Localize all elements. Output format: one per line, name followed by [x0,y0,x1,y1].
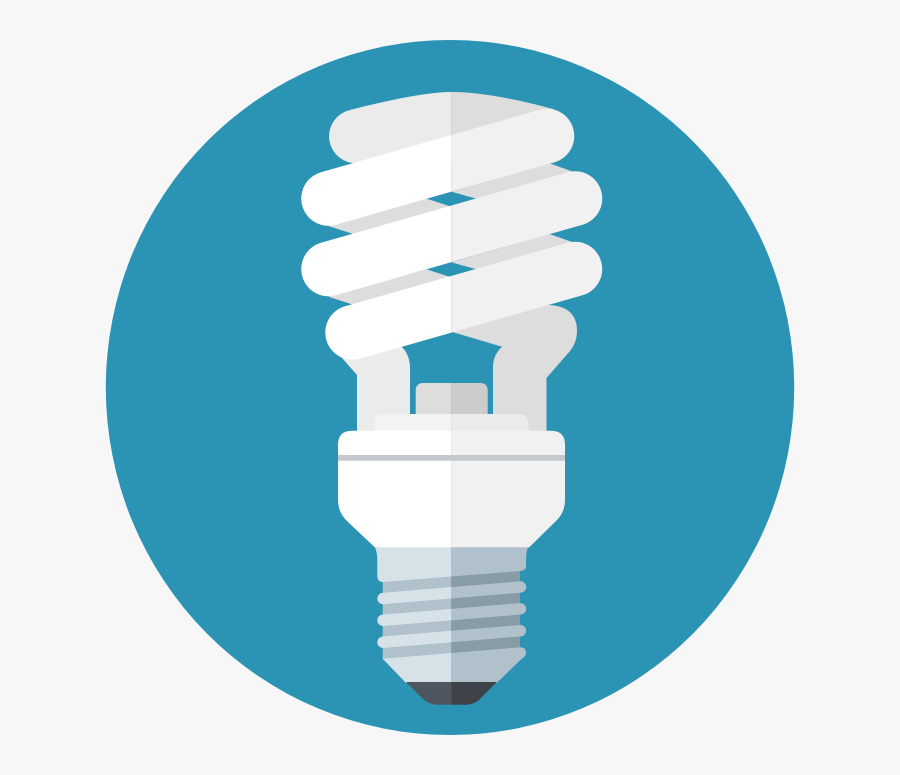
collar [410,414,528,442]
screw core [383,570,520,660]
spiral shadow strips [328,163,573,305]
plastic base [338,431,565,548]
back of spiral tube [329,92,553,163]
base band [338,455,565,461]
infographic: energy-saving bulb icon [106,40,794,735]
socket bottom [383,647,526,683]
background circle [106,40,794,735]
contact tip [406,682,497,705]
base centre seam [451,442,452,547]
screw threads [383,587,520,642]
socket neck [375,547,528,582]
centre block [416,383,488,423]
bulb [328,92,577,705]
right lower leg [452,305,577,432]
left lower leg [335,320,410,432]
spiral tubes [328,136,575,332]
